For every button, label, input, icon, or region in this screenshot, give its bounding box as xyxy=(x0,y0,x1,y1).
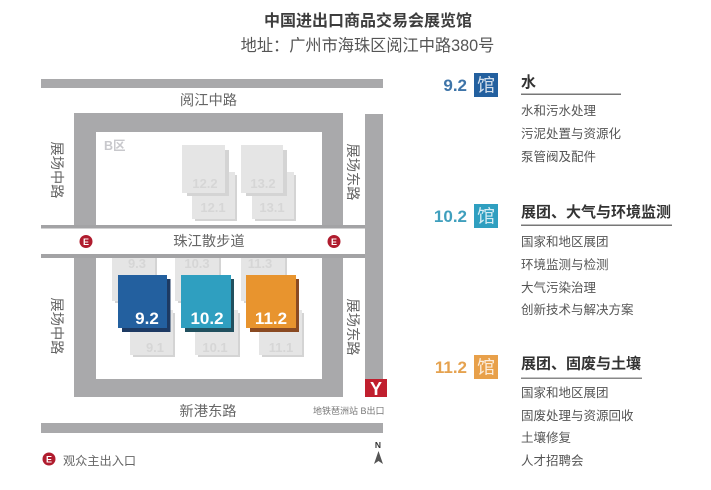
hall tag 11.2: 11.2 xyxy=(435,358,467,377)
list: soil: 固废处理与资源回收 xyxy=(521,408,634,423)
list: water xyxy=(521,104,622,164)
hall tag 11.2 xyxy=(435,355,498,379)
hall tag 10.2: 10.2 xyxy=(434,207,467,226)
entrance marker: east xyxy=(328,235,340,248)
list: water: 污泥处置与资源化 xyxy=(521,127,622,141)
map xyxy=(41,79,387,468)
hall 11.3 xyxy=(241,256,287,303)
metro label: 地铁琶洲站 B出口 xyxy=(313,405,385,416)
list: soil: 国家和地区展团 xyxy=(521,385,609,400)
panel: hall 11.2 xyxy=(435,354,642,468)
hall 9.3 xyxy=(112,256,157,303)
panel: hall 10.2 xyxy=(434,203,672,317)
title: 中国进出口商品交易会展览馆 xyxy=(264,11,472,30)
heading: water: 水 xyxy=(521,74,536,91)
hall 11.2: 11.2 xyxy=(255,309,287,328)
subtitle: address: 地址：广州市海珠区阅江中路380号 xyxy=(241,37,494,55)
hall 9.2 xyxy=(118,275,170,332)
hall 9.1: 9.1 xyxy=(146,340,164,355)
road label: west upper: 展场中路 xyxy=(48,141,65,199)
hall 10.1 xyxy=(195,310,240,357)
list: air: 大气污染治理 xyxy=(521,280,597,295)
road label: east lower: 展场东路 xyxy=(344,298,361,356)
north arrow xyxy=(374,440,383,464)
list: air: 国家和地区展团 xyxy=(521,234,609,249)
hall tag 10.2 xyxy=(434,204,498,228)
road label: promenade: 珠江散步道 xyxy=(173,233,245,250)
list: air: 创新技术与解决方案 xyxy=(521,302,634,317)
label: B zone: B区 xyxy=(104,139,126,153)
legend: entrance: E xyxy=(46,454,52,464)
hall 11.2 xyxy=(246,275,299,332)
road label: west lower: 展场中路 xyxy=(48,297,65,355)
heading: delegations, solid waste and soil: 展团、固废与土壤 xyxy=(521,354,641,372)
north arrow: N xyxy=(375,440,381,450)
entrance marker: west xyxy=(80,235,92,248)
list: soil xyxy=(521,385,634,468)
hall 13.1: 13.1 xyxy=(259,200,285,215)
hall 11.1: 11.1 xyxy=(269,340,293,355)
hall 12.2 xyxy=(182,145,229,196)
list: air: 环境监测与检测 xyxy=(521,257,609,272)
hall tag 11.2: 馆 xyxy=(477,358,495,378)
metro icon: Y xyxy=(370,379,382,399)
panel: hall 9.2 xyxy=(443,73,622,164)
hall 10.3: 10.3 xyxy=(184,256,210,271)
hall tag 9.2 xyxy=(443,73,498,97)
hall 13.2: 13.2 xyxy=(250,176,276,191)
entrance marker: east: E xyxy=(331,237,337,247)
hall 10.3 xyxy=(175,256,221,303)
hall 13.2 xyxy=(241,145,287,196)
list: water: 水和污水处理 xyxy=(521,104,597,118)
road label: east upper: 展场东路 xyxy=(344,143,361,201)
hall 12.1 xyxy=(192,172,237,221)
hall 9.2: 9.2 xyxy=(135,309,159,328)
list: soil: 人才招聘会 xyxy=(521,454,584,468)
hall 11.3: 11.3 xyxy=(248,256,272,271)
road label: top: 阅江中路 xyxy=(180,92,237,109)
hall 10.2: 10.2 xyxy=(190,309,224,328)
hall 10.1: 10.1 xyxy=(202,340,228,355)
hall 13.1 xyxy=(252,172,296,221)
hall 12.2: 12.2 xyxy=(192,176,218,191)
hall tag 9.2: 馆 xyxy=(477,76,495,96)
hall tag 9.2: 9.2 xyxy=(443,76,467,95)
road network xyxy=(41,79,383,433)
list: water: 泵管阀及配件 xyxy=(521,149,596,164)
hall 10.2 xyxy=(181,275,234,332)
heading: delegations, air and monitoring: 展团、大气与环境监测 xyxy=(521,203,671,221)
entrance marker: west: E xyxy=(83,237,89,247)
road label: bottom: 新港东路 xyxy=(179,403,237,420)
metro icon xyxy=(365,379,387,399)
legend: entrance: 观众主出入口 xyxy=(63,454,136,468)
hall 9.1 xyxy=(130,310,175,357)
hall 12.1: 12.1 xyxy=(200,200,226,215)
hall tag 10.2: 馆 xyxy=(477,206,495,226)
hall 11.1 xyxy=(259,310,304,357)
hall 9.3: 9.3 xyxy=(128,256,146,271)
list: air xyxy=(521,234,634,317)
list: soil: 土壤修复 xyxy=(521,430,572,445)
